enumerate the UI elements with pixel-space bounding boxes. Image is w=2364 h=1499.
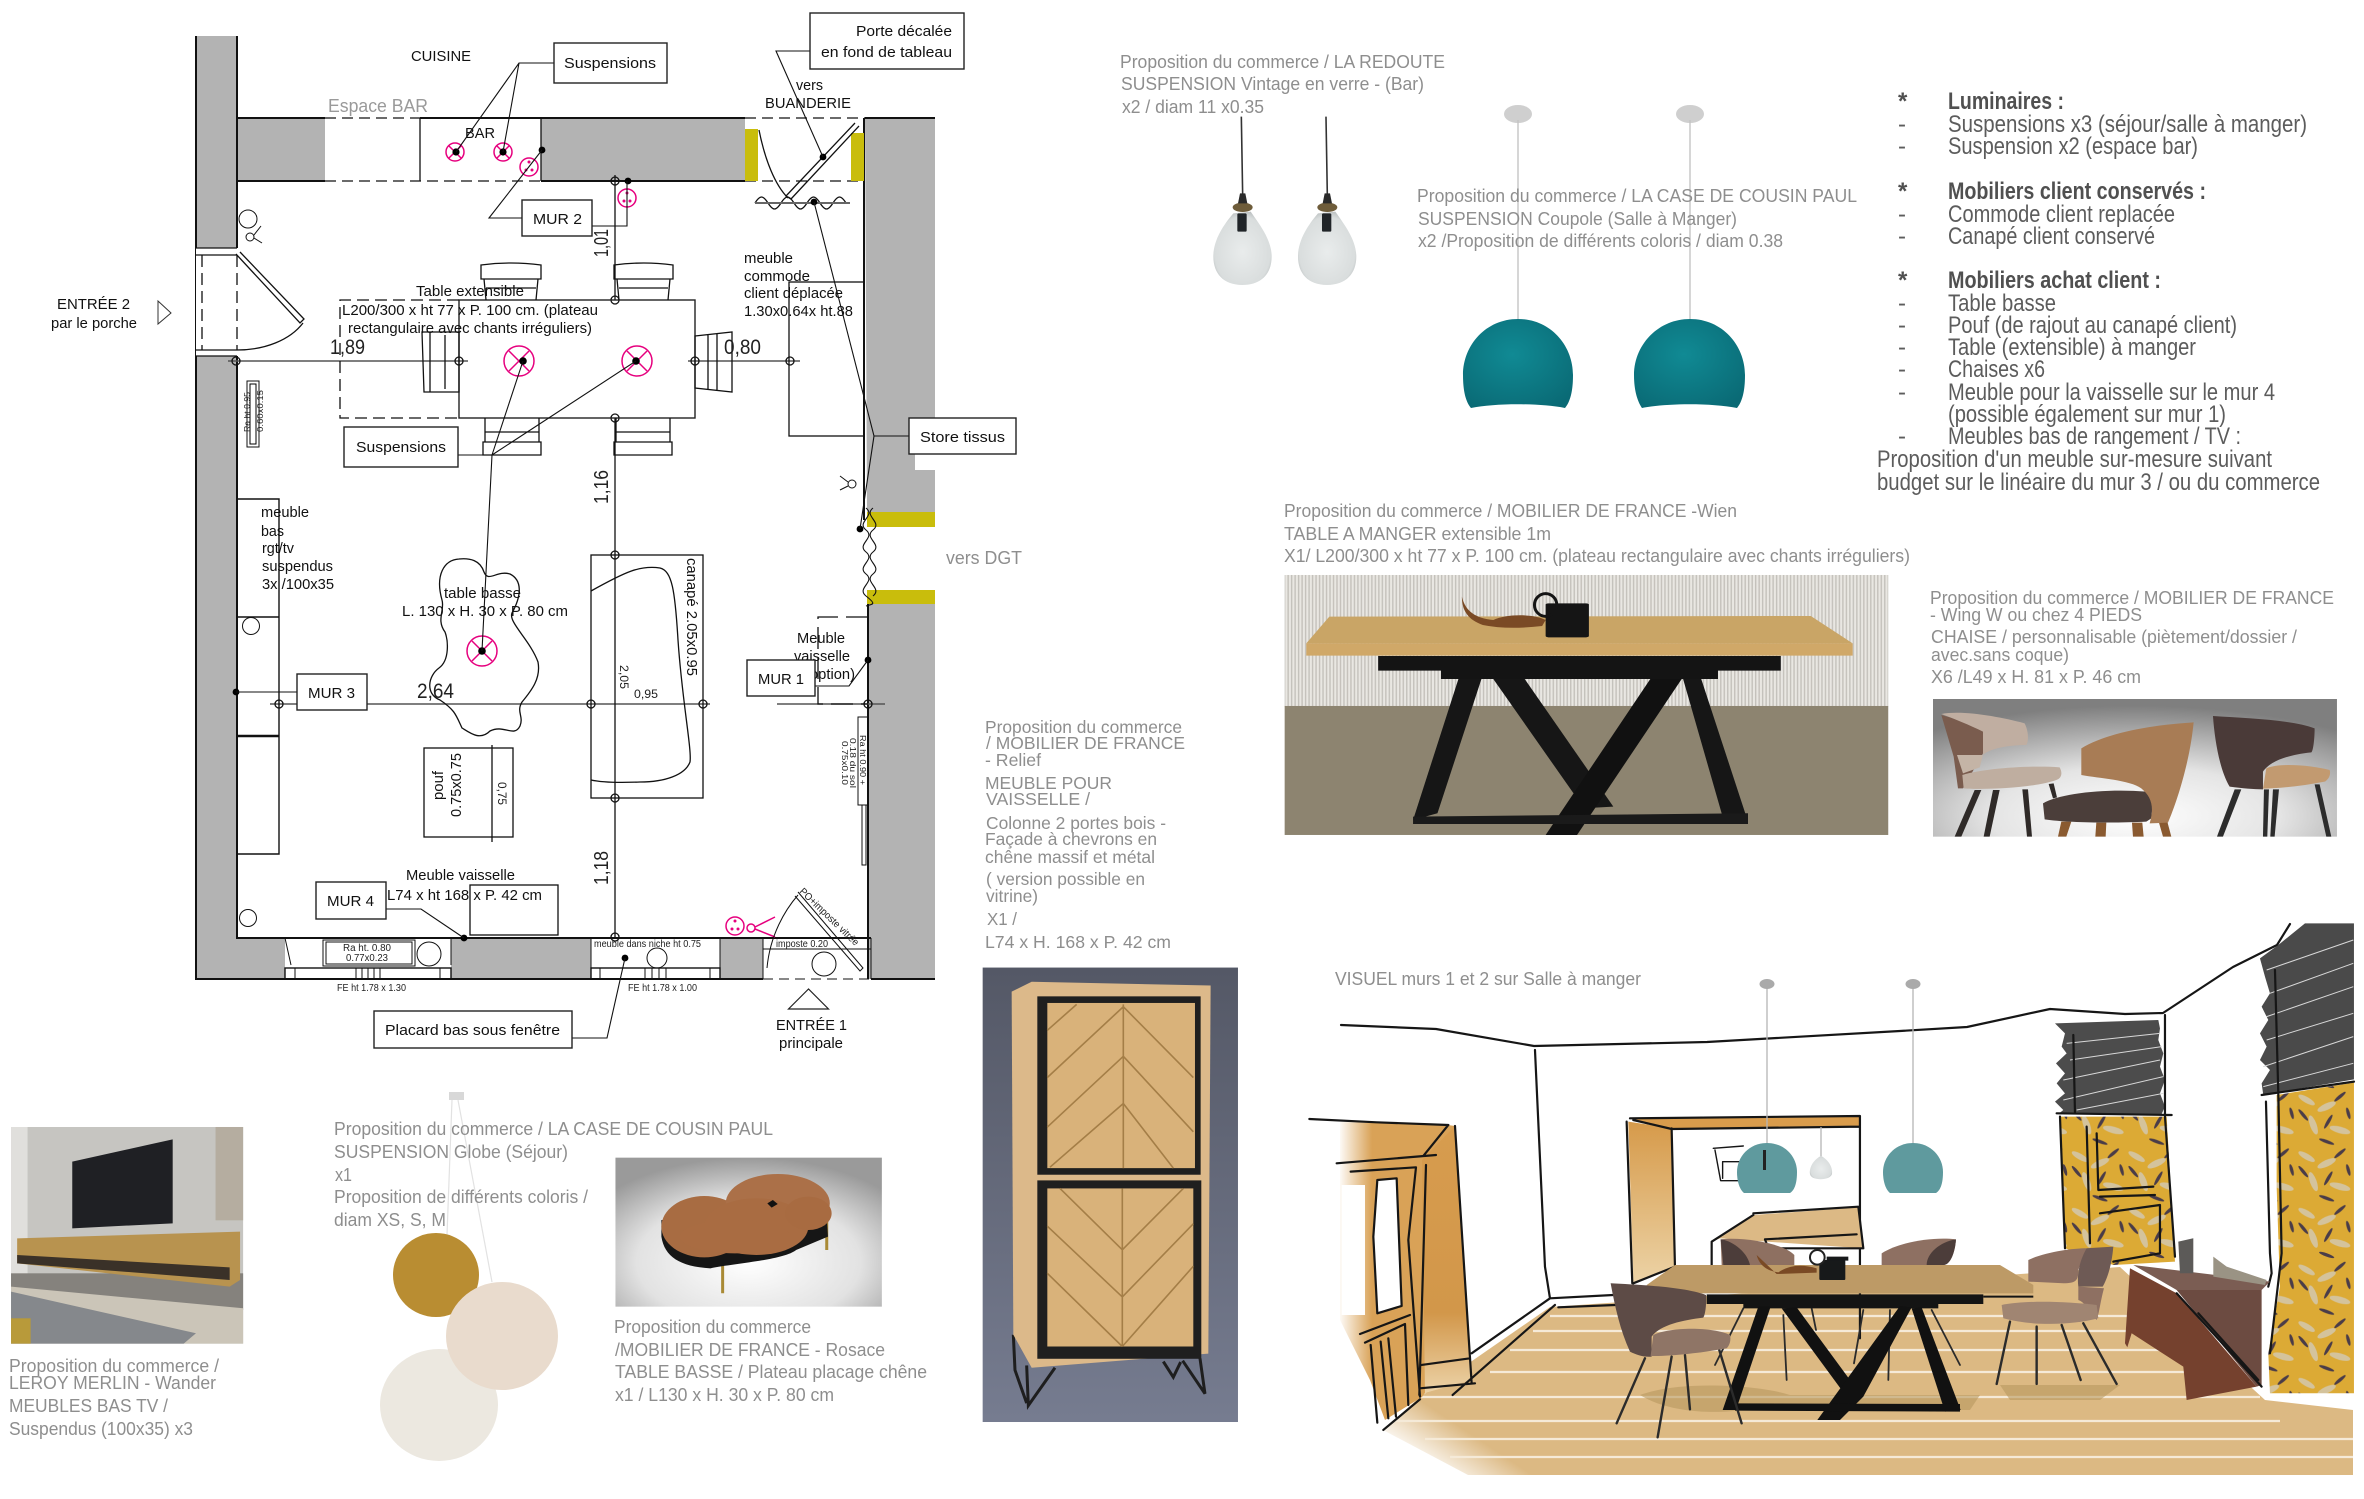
caption: Relief cabinet: VAISSELLE /: [986, 789, 1090, 809]
caption: Rosace: TABLE BASSE / Plateau placage chêne: [615, 1362, 927, 1382]
plan labels: 1,01: [591, 229, 613, 257]
list: furniture summary: (possible également sur mur 1): [1948, 401, 2226, 428]
caption: Rosace: Proposition du commerce: [614, 1317, 811, 1337]
coffee table blob: [430, 559, 539, 736]
plan labels: 0.77x0.23: [346, 953, 388, 964]
list: furniture summary: *: [1898, 267, 1908, 294]
caption: Leroy Merlin: Proposition du commerce /: [9, 1356, 219, 1376]
plan labels: rgt/tv: [262, 540, 294, 557]
label boxes: MUR 4: [327, 893, 374, 910]
list: furniture summary: Meuble pour la vaisselle sur le mur 4: [1948, 379, 2275, 406]
plan labels: par le porche: [51, 315, 137, 332]
caption: Globe: diam XS, S, M: [334, 1210, 446, 1230]
caption: Wing chair: avec.sans coque): [1931, 645, 2069, 665]
plan labels: 1,89: [330, 336, 365, 359]
plan labels: 3x /100x35: [262, 576, 334, 593]
list: furniture summary: Meubles bas de rangement / TV :: [1948, 423, 2241, 450]
photo: chevron cabinet: [983, 968, 1238, 1422]
caption: Cousin Paul coupole: SUSPENSION Coupole (Salle à Manger): [1418, 209, 1737, 229]
caption: Relief cabinet: L74 x H. 168 x P. 42 cm: [985, 932, 1171, 952]
list: furniture summary: -: [1898, 201, 1906, 228]
caption: Wing chair: CHAISE / personnalisable (piètement/dossier /: [1931, 627, 2297, 647]
list: furniture summary: -: [1898, 312, 1906, 339]
label boxes: Store tissus: [920, 429, 1005, 446]
panel: floor plan: [51, 13, 1022, 1052]
caption: Relief cabinet: / MOBILIER DE FRANCE: [986, 733, 1185, 753]
plan labels: Ra ht. 0.80: [343, 943, 391, 954]
list: furniture summary: -: [1898, 111, 1906, 138]
caption: Cousin Paul coupole: Proposition du commerce / LA CASE DE COUSIN PAUL: [1417, 186, 1857, 206]
list: furniture summary: Commode client replacée: [1948, 201, 2175, 228]
photo: dining table: [1285, 575, 1888, 835]
plan labels: suspendus: [262, 558, 333, 575]
list: furniture summary: *: [1898, 88, 1908, 115]
plan labels: pouf: [430, 770, 447, 800]
list: furniture summary: -: [1898, 379, 1906, 406]
plan labels: Meuble vaisselle: [406, 867, 515, 884]
plan labels: 0.18 du sol: [848, 738, 857, 788]
list: furniture summary: -: [1898, 334, 1906, 361]
label boxes: Suspensions: [356, 439, 446, 456]
caption: Wien table: Proposition du commerce / MOBILIER DE FRANCE -Wien: [1284, 501, 1737, 521]
pendant globes: [380, 1092, 558, 1461]
caption: Relief cabinet: Colonne 2 portes bois -: [986, 813, 1166, 833]
plan labels: Ra ht 0.90 +: [858, 735, 867, 785]
plan labels: ENTRÉE 2: [57, 296, 130, 313]
list: furniture summary: *: [1898, 178, 1908, 205]
caption: Rosace: /MOBILIER DE FRANCE - Rosace: [615, 1340, 885, 1360]
caption: Leroy Merlin: MEUBLES BAS TV /: [9, 1396, 168, 1416]
caption: Wien table: [1284, 501, 1910, 566]
list: furniture summary: Pouf (de rajout au canapé client): [1948, 312, 2237, 339]
list: furniture summary: -: [1898, 133, 1906, 160]
caption: La Redoute: SUSPENSION Vintage en verre - (Bar): [1121, 74, 1424, 94]
caption: Relief cabinet: Façade à chevrons en: [985, 829, 1157, 849]
caption: La Redoute: Proposition du commerce / LA REDOUTE: [1120, 52, 1445, 72]
plan labels: vers DGT: [946, 548, 1022, 568]
window details: [247, 381, 871, 979]
glass pendants: [1213, 117, 1356, 285]
plan labels: Table extensible: [416, 283, 524, 300]
plan labels: vaisselle: [794, 648, 850, 665]
list: furniture summary: -: [1898, 356, 1906, 383]
caption: Cousin Paul coupole: [1417, 186, 1857, 251]
caption: Wing chair: Proposition du commerce / MOBILIER DE FRANCE: [1930, 588, 2334, 608]
plan labels: meuble dans niche ht 0.75: [594, 939, 701, 950]
left door and orange wall: [1309, 1050, 1615, 1430]
list: furniture summary: Table basse: [1948, 290, 2056, 317]
caption: Wien table: TABLE A MANGER extensible 1m: [1284, 524, 1551, 544]
caption: Globe: Proposition du commerce / LA CASE DE COUSIN PAUL: [334, 1119, 773, 1139]
label boxes: MUR 3: [308, 685, 355, 702]
caption: Wien table: X1/ L200/300 x ht 77 x P. 100 cm. (plateau rectangulaire avec chants irréguliers): [1284, 546, 1910, 566]
plan labels: principale: [779, 1035, 843, 1052]
plan labels: 0.75x0.10: [840, 741, 849, 786]
list: furniture summary: Suspensions x3 (séjour/salle à manger): [1948, 111, 2307, 138]
front right chair: [1997, 1247, 2117, 1384]
list: furniture summary: Suspension x2 (espace bar): [1948, 133, 2198, 160]
list: furniture summary: Luminaires :: [1948, 88, 2064, 115]
sideboard: [2125, 1238, 2270, 1400]
plan labels: 0,95: [634, 687, 658, 701]
caption: Relief cabinet: - Relief: [985, 750, 1041, 770]
pendants in scene: [1737, 979, 1943, 1193]
plan labels: meuble: [744, 250, 793, 267]
caption: Wing chair: X6 /L49 x H. 81 x P. 46 cm: [1931, 667, 2141, 687]
caption: Globe: Proposition de différents coloris /: [334, 1187, 588, 1207]
photo: chairs: [1933, 699, 2337, 837]
caption: Globe: x1: [335, 1165, 352, 1185]
teal pendants: [1463, 105, 1745, 408]
caption: Relief cabinet: X1 /: [987, 909, 1017, 929]
back chairs: [1715, 1239, 1960, 1380]
label boxes: Porte décalée: [856, 23, 952, 40]
caption: Relief cabinet: ( version possible en: [986, 869, 1145, 889]
list: furniture summary: Canapé client conservé: [1948, 223, 2155, 250]
label boxes: MUR 2: [533, 211, 582, 228]
list: furniture summary: Chaises x6: [1948, 356, 2045, 383]
caption: Relief cabinet: chêne massif et métal: [985, 847, 1155, 867]
caption: Globe: SUSPENSION Globe (Séjour): [334, 1142, 568, 1162]
plan labels: PO+imposte vitrée: [797, 886, 861, 949]
laundry door: [755, 123, 859, 209]
plan labels: BUANDERIE: [765, 95, 851, 112]
walls: [196, 36, 935, 979]
caption: Relief cabinet: MEUBLE POUR: [985, 773, 1112, 793]
list: furniture summary: -: [1898, 423, 1906, 450]
list: furniture summary: Proposition d'un meuble sur-mesure suivant: [1877, 446, 2272, 473]
front left chair: [1611, 1283, 1742, 1437]
label boxes: en fond de tableau: [821, 44, 952, 61]
caption: Leroy Merlin: Suspendus (100x35) x3: [9, 1419, 193, 1439]
plan labels: table basse: [444, 585, 521, 602]
plan labels: L74 x ht 168 x P. 42 cm: [387, 887, 542, 904]
label boxes: [297, 13, 1016, 1048]
plan labels: 1.30x0.64x ht.88: [744, 303, 853, 320]
plan labels: client déplacée: [744, 285, 843, 302]
plan labels: bas: [261, 523, 284, 540]
plan labels: option): [810, 666, 855, 683]
leader lines: [236, 51, 909, 1038]
plan labels: 0,75: [495, 782, 509, 805]
plan labels: Meuble: [797, 630, 845, 647]
list: furniture summary: [1877, 88, 2320, 496]
ceiling line: [1341, 924, 2290, 1046]
dining table in scene: [1647, 1250, 2033, 1420]
caption: La Redoute: x2 / diam 11 x0.35: [1122, 97, 1264, 117]
plan labels: 2,05: [617, 665, 631, 689]
plan labels: 1,18: [591, 851, 613, 885]
plan labels: canapé 2.05x0.95: [683, 558, 700, 676]
plan labels: 0.60x0.15: [256, 389, 265, 432]
plan labels: 0,80: [724, 336, 761, 359]
label boxes: Suspensions: [564, 55, 656, 72]
list: furniture summary: Mobiliers client conservés :: [1948, 178, 2206, 205]
furniture outlines: [237, 282, 868, 935]
plan labels: Ra ht 0.95: [243, 391, 252, 432]
label boxes: Placard bas sous fenêtre: [385, 1022, 560, 1039]
plan labels: vers: [796, 77, 823, 94]
caption: Relief cabinet: [985, 717, 1185, 952]
dining table and chairs: [340, 263, 732, 455]
caption: Globe: [334, 1119, 773, 1230]
curtains: [2055, 923, 2354, 1393]
caption: visuel: VISUEL murs 1 et 2 sur Salle à manger: [1335, 969, 1641, 989]
plan labels: rectangulaire avec chants irréguliers): [348, 320, 592, 337]
floor: [1383, 1267, 2353, 1475]
plan labels: 0.75x0.75: [448, 753, 465, 817]
caption: Rosace: x1 / L130 x H. 30 x P. 80 cm: [615, 1385, 834, 1405]
lighting symbols: [233, 143, 871, 961]
caption: Relief cabinet: vitrine): [986, 886, 1038, 906]
plan labels: CUISINE: [411, 48, 471, 65]
label boxes: MUR 1: [758, 671, 804, 688]
scene: dining room perspective sketch: [1309, 923, 2354, 1475]
plan labels: BAR: [465, 125, 495, 142]
plan labels: ENTRÉE 1: [776, 1017, 847, 1034]
photo: coffee table: [615, 1158, 882, 1307]
plan labels: Espace BAR: [328, 96, 428, 116]
back wall mirror: [1712, 1207, 1863, 1265]
plan labels: 1,16: [591, 470, 613, 504]
caption: Cousin Paul coupole: x2 /Proposition de différents coloris / diam 0.38: [1418, 231, 1783, 251]
plan labels: FE ht 1.78 x 1.00: [628, 983, 697, 994]
caption: La Redoute: [1120, 52, 1445, 117]
caption: Wing chair: - Wing W ou chez 4 PIEDS: [1930, 605, 2142, 625]
caption: Leroy Merlin: LEROY MERLIN - Wander: [9, 1373, 216, 1393]
caption: Relief cabinet: Proposition du commerce: [985, 717, 1182, 737]
plan labels: 2,64: [417, 680, 454, 703]
list: furniture summary: Table (extensible) à manger: [1948, 334, 2196, 361]
photo: TV unit: [11, 1127, 243, 1344]
list: furniture summary: Mobiliers achat client :: [1948, 267, 2161, 294]
alcove: [1627, 1116, 1860, 1338]
caption: Wing chair: [1930, 588, 2334, 687]
caption: Leroy Merlin: [9, 1356, 219, 1439]
caption: Rosace: [614, 1317, 927, 1405]
list: furniture summary: -: [1898, 290, 1906, 317]
dimension lines: [228, 175, 885, 941]
plan labels: FE ht 1.78 x 1.30: [337, 983, 406, 994]
plan labels: meuble: [261, 504, 309, 521]
plan labels: commode: [744, 268, 810, 285]
list: furniture summary: -: [1898, 223, 1906, 250]
entry door 2: [196, 248, 304, 356]
plan labels: imposte 0.20: [776, 939, 828, 950]
plan labels: [51, 48, 1022, 1052]
plan labels: L200/300 x ht 77 x P. 100 cm. (plateau: [342, 302, 598, 319]
plan labels: L. 130 x H. 30 x P. 80 cm: [402, 603, 568, 620]
